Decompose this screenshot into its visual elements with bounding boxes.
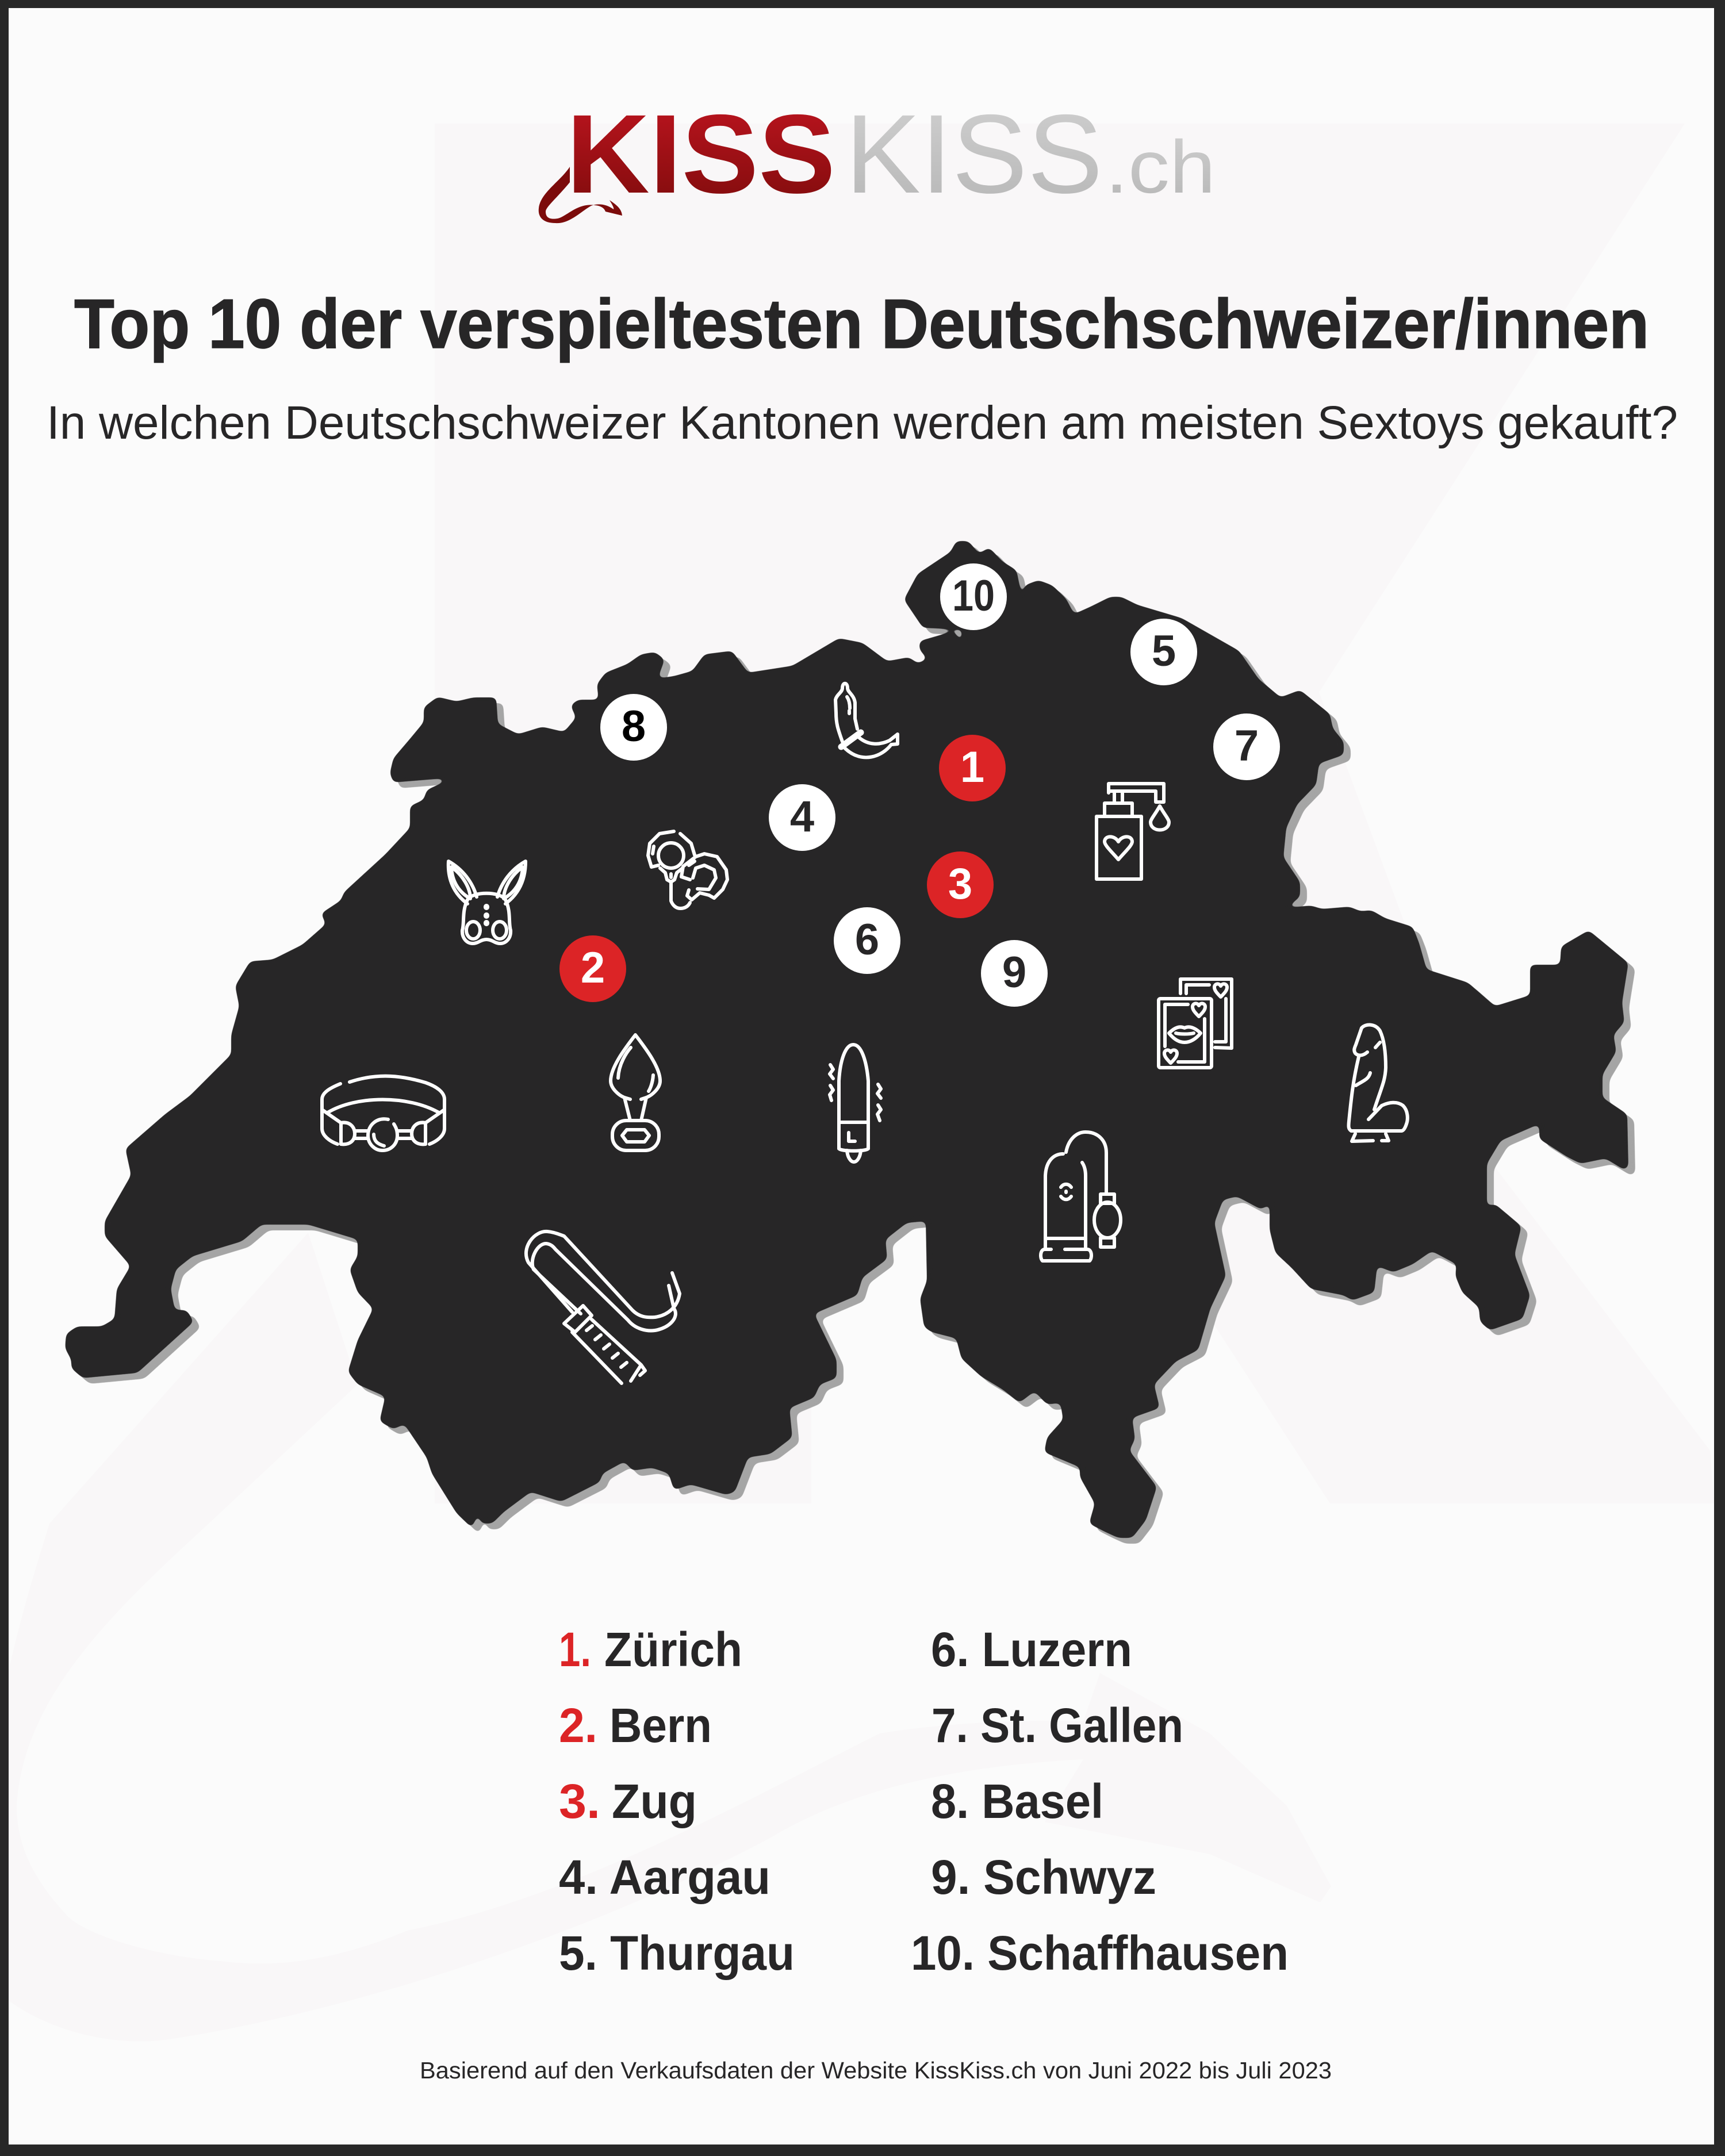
icon: furry handcuffs — [648, 831, 727, 908]
marker 6: 6 — [855, 915, 879, 964]
marker 1: 1 — [960, 743, 984, 792]
rank 1: 1. — [559, 1622, 591, 1677]
rank 3 — [559, 1774, 697, 1828]
map of Switzerland — [65, 541, 1635, 1544]
marker 3: 3 — [948, 860, 972, 908]
rank 3: Zug — [612, 1774, 697, 1828]
icon: whip — [526, 1232, 680, 1383]
icon: dildo — [1348, 1025, 1408, 1141]
icon: penis pump — [1041, 1132, 1121, 1261]
rank 3: 3. — [559, 1774, 600, 1828]
marker 10 — [940, 563, 1007, 630]
marker 4 — [769, 784, 835, 851]
marker 5: 5 — [1152, 627, 1176, 676]
icon: anal plug — [611, 1035, 660, 1150]
logo: KissKiss.ch — [539, 91, 1216, 223]
marker 2: 2 — [581, 943, 605, 992]
logo suffix: .ch — [1105, 125, 1216, 209]
icon: lube bottle — [1097, 784, 1169, 879]
rank 10: 10. Schaffhausen — [911, 1926, 1289, 1980]
logo word red: KISS — [566, 91, 835, 217]
marker 7: 7 — [1235, 722, 1259, 770]
marker 9 — [981, 940, 1048, 1007]
rank 1: Zürich — [604, 1622, 742, 1677]
marker 10: 10 — [952, 571, 995, 620]
subtitle: In welchen Deutschschweizer Kantonen werden am meisten Sextoys gekauft? — [47, 397, 1678, 449]
icon: condom — [835, 684, 898, 757]
rank 8: 8. Basel — [931, 1774, 1103, 1828]
rank 4: 4. Aargau — [559, 1850, 770, 1904]
icon: bunny mask — [448, 861, 526, 943]
marker 4: 4 — [790, 792, 814, 841]
footer source note: Basierend auf den Verkaufsdaten der Website KissKiss.ch von Juni 2022 bis Juli 2023 — [420, 2057, 1332, 2084]
title: Top 10 der verspieltesten Deutschschweizer/innen — [74, 285, 1649, 363]
rank 2 — [559, 1698, 712, 1752]
marker 8: 8 — [622, 702, 646, 751]
map shape — [65, 541, 1628, 1538]
map shadow — [72, 547, 1635, 1544]
icon: playing cards — [1159, 979, 1232, 1068]
rank 5: 5. Thurgau — [559, 1926, 795, 1980]
ranking list — [559, 1622, 1289, 1980]
rank 6: 6. Luzern — [931, 1622, 1132, 1677]
rank 7: 7. St. Gallen — [931, 1698, 1183, 1752]
marker 1 — [939, 735, 1006, 801]
marker 2 — [559, 935, 626, 1002]
rank 9: 9. Schwyz — [931, 1850, 1156, 1904]
rank 2: 2. — [559, 1698, 597, 1752]
rank 2: Bern — [610, 1698, 712, 1752]
marker 8 — [600, 694, 667, 761]
icon: vibrator — [830, 1045, 881, 1162]
marker 3 — [927, 851, 994, 918]
marker 7 — [1213, 713, 1280, 780]
logo word gray: KISS — [845, 91, 1103, 217]
icon: ball gag collar — [322, 1076, 444, 1150]
logo devil tail — [539, 167, 622, 223]
marker 5 — [1130, 619, 1197, 685]
marker 6 — [834, 907, 900, 974]
marker 9: 9 — [1002, 948, 1026, 997]
